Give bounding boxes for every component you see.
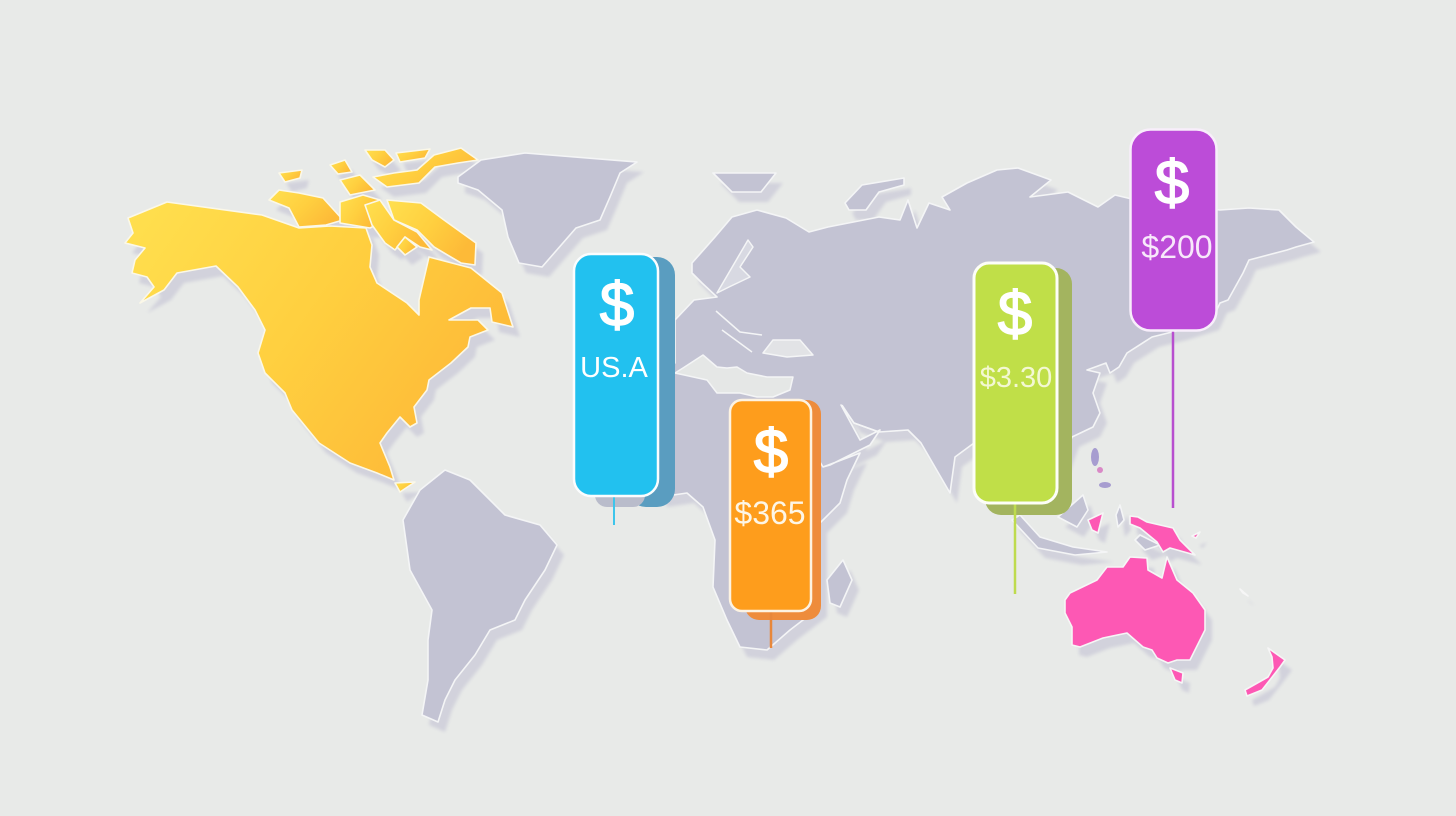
pin: $3.30: $3.30 bbox=[980, 362, 1052, 394]
icon: Philippines islands bbox=[1091, 448, 1111, 488]
North America bbox=[125, 148, 513, 492]
pin: $200: $200 bbox=[1141, 229, 1213, 265]
pin: $365: $365 bbox=[734, 495, 806, 531]
pin: $365: $ bbox=[754, 418, 788, 487]
world map bbox=[125, 148, 1321, 732]
Oceania bbox=[1065, 513, 1285, 696]
pin: $200 bbox=[1130, 130, 1216, 508]
pin: USA: US.A bbox=[580, 352, 648, 384]
pin: $200: $ bbox=[1155, 149, 1189, 218]
pin: $3.30: $ bbox=[998, 280, 1032, 349]
pin: USA bbox=[574, 254, 675, 525]
pin: USA: $ bbox=[600, 271, 634, 340]
inland seas: Mediterranean, Black Sea and Baltic bbox=[675, 240, 879, 432]
pin: $3.30 bbox=[974, 263, 1072, 594]
pin: $365 bbox=[730, 400, 821, 648]
continents: Greenland, South America, Eurasia and Africa bbox=[403, 153, 1314, 722]
map drop shadow bbox=[132, 158, 1321, 732]
